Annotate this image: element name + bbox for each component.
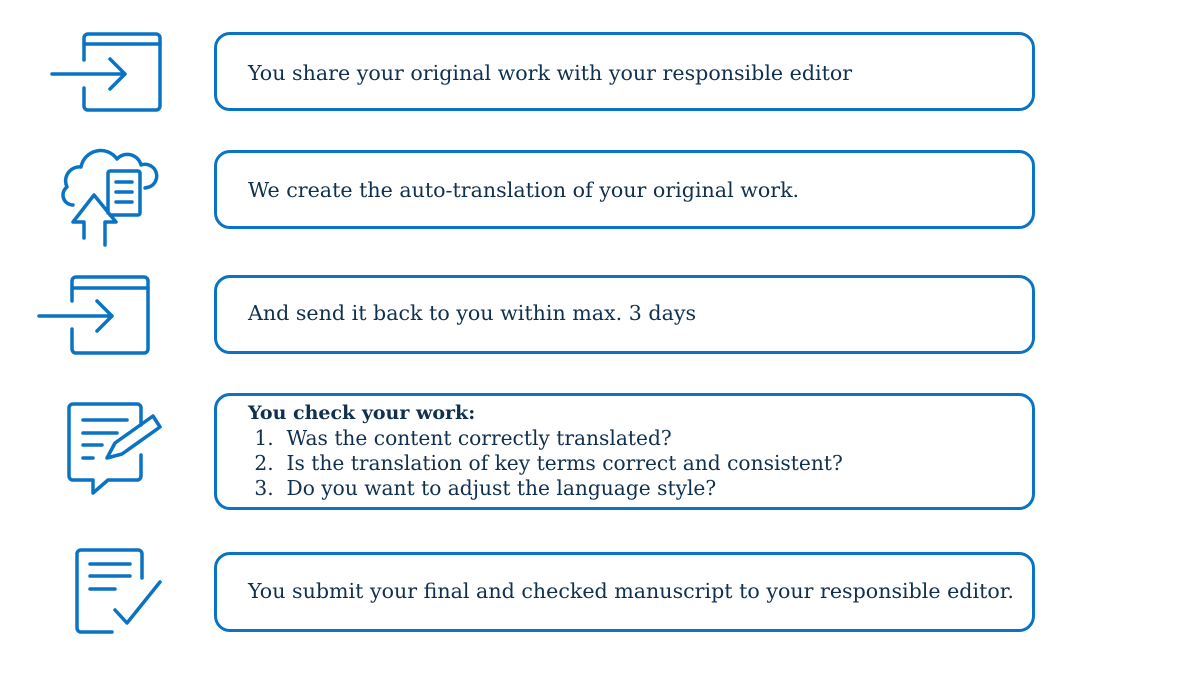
- step 1: You share your original work with your responsible editor: [248, 61, 852, 85]
- step 3: [214, 275, 1035, 354]
- step 5: [214, 552, 1035, 632]
- step 3: And send it back to you within max. 3 days: [248, 301, 696, 325]
- step 2: [214, 150, 1035, 229]
- icon: review note: [69, 404, 160, 493]
- step 5: You submit your final and checked manuscript to your responsible editor.: [248, 579, 1014, 603]
- icons: [37, 32, 162, 634]
- step 1: [214, 32, 1035, 111]
- step 4: [214, 393, 1035, 510]
- icon: cloud upload: [63, 151, 157, 245]
- icon: import 1: [52, 34, 160, 110]
- step 4: 2. Is the translation of key terms correct and consistent?: [254, 451, 843, 475]
- step 4: 1. Was the content correctly translated?: [254, 426, 672, 450]
- icon: checked doc: [77, 550, 160, 632]
- step 2: We create the auto-translation of your original work.: [248, 178, 799, 202]
- icon: import 2: [39, 277, 148, 353]
- step 4: You check your work:: [248, 402, 475, 424]
- step 4: 3. Do you want to adjust the language style?: [254, 476, 716, 500]
